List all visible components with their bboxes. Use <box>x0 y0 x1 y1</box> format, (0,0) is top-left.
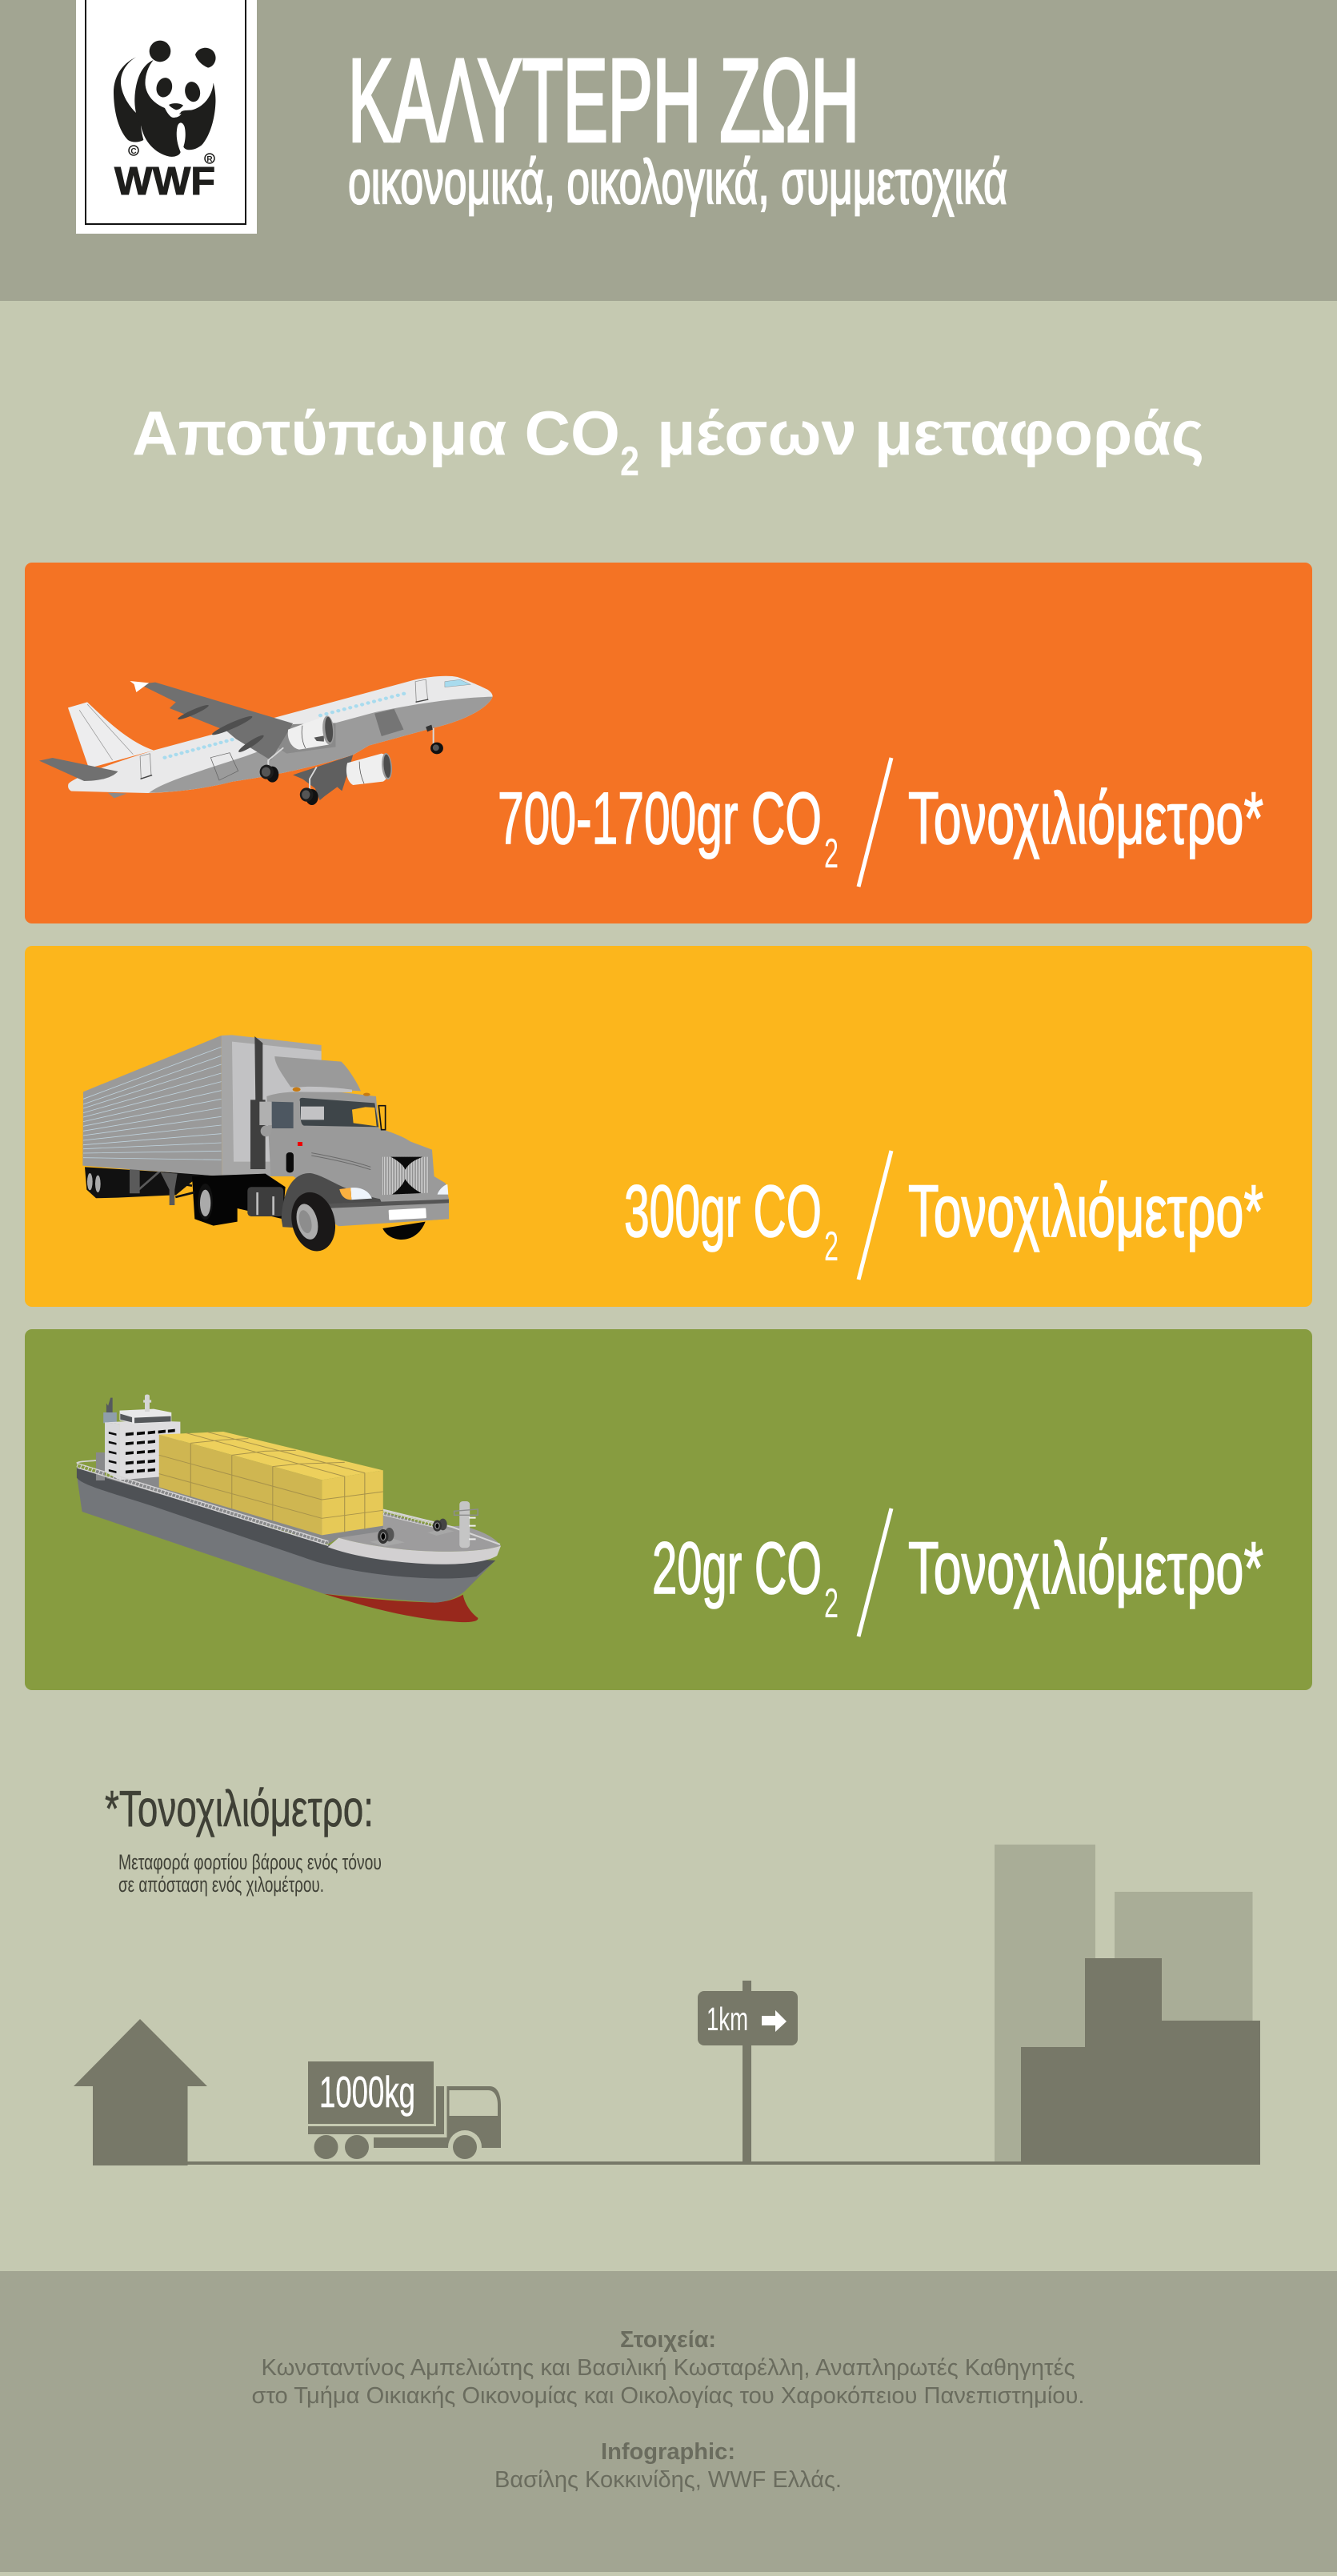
definition text <box>118 1850 382 1897</box>
credits: infographic <box>494 2439 842 2493</box>
main heading: Αποτύπωμα CO <box>132 398 620 468</box>
icon: delivery truck <box>308 2061 501 2164</box>
credits: infographic: Βασίλης Κοκκινίδης, WWF Ελλάς. <box>494 2467 842 2493</box>
header subtitle: οικονομικά, οικολογικά, συμμετοχικά <box>348 146 1007 217</box>
credits: data: Στοιχεία: <box>620 2327 716 2353</box>
stat: airplane: 2 <box>824 831 839 877</box>
main heading <box>132 398 1204 485</box>
stat: truck: 300gr CO <box>624 1171 822 1252</box>
ground line <box>187 2161 1027 2165</box>
stat: airplane <box>498 758 1263 887</box>
icon: cargo ship <box>77 1394 501 1622</box>
buildings <box>995 1845 1260 2165</box>
definition text: Μεταφορά φορτίου βάρους ενός τόνου <box>118 1850 382 1874</box>
icon: airplane <box>39 676 493 805</box>
definition heading: *Τονοχιλιόμετρο: <box>105 1780 374 1837</box>
icon: truck <box>82 1035 449 1256</box>
WWF logo: WWF <box>114 160 215 203</box>
stat: ship: 20gr CO <box>652 1528 822 1609</box>
credits: data: στο Τμήμα Οικιακής Οικονομίας και Οικολογίας του Χαροκόπειου Πανεπιστημίου. <box>251 2383 1085 2409</box>
stat: ship <box>652 1508 1263 1637</box>
stat: truck: 2 <box>824 1224 839 1270</box>
stat: truck <box>624 1151 1263 1280</box>
definition text: σε απόσταση ενός χιλομέτρου. <box>118 1873 324 1897</box>
diagram: one tonne-kilometre route <box>74 1845 1260 2165</box>
header title: ΚΑΛΥΤΕΡΗ ΖΩΗ <box>348 35 859 166</box>
credits: data: Κωνσταντίνος Αμπελιώτης και Βασιλική Κωσταρέλλη, Αναπληρωτές Καθηγητές <box>261 2355 1075 2381</box>
footer band <box>0 2271 1337 2572</box>
WWF logo <box>76 0 257 234</box>
panel: ship <box>25 1329 1312 1690</box>
icon: house <box>74 2019 207 2165</box>
credits: data <box>251 2327 1085 2409</box>
header band <box>0 0 1337 301</box>
stat: airplane: 700-1700gr CO <box>498 778 822 859</box>
icon: delivery truck: 1000kg <box>319 2067 415 2117</box>
stat: ship: 2 <box>824 1580 839 1627</box>
main heading: μέσων μεταφοράς <box>657 398 1204 468</box>
WWF logo: R <box>206 155 213 164</box>
panel: truck <box>25 946 1312 1307</box>
main heading: 2 <box>620 439 639 485</box>
panel: airplane <box>25 563 1312 923</box>
credits: infographic: Infographic: <box>601 2439 735 2465</box>
signpost: 1km: 1km <box>707 2001 748 2037</box>
WWF logo: C <box>130 147 137 156</box>
signpost: 1km <box>698 1981 798 2165</box>
